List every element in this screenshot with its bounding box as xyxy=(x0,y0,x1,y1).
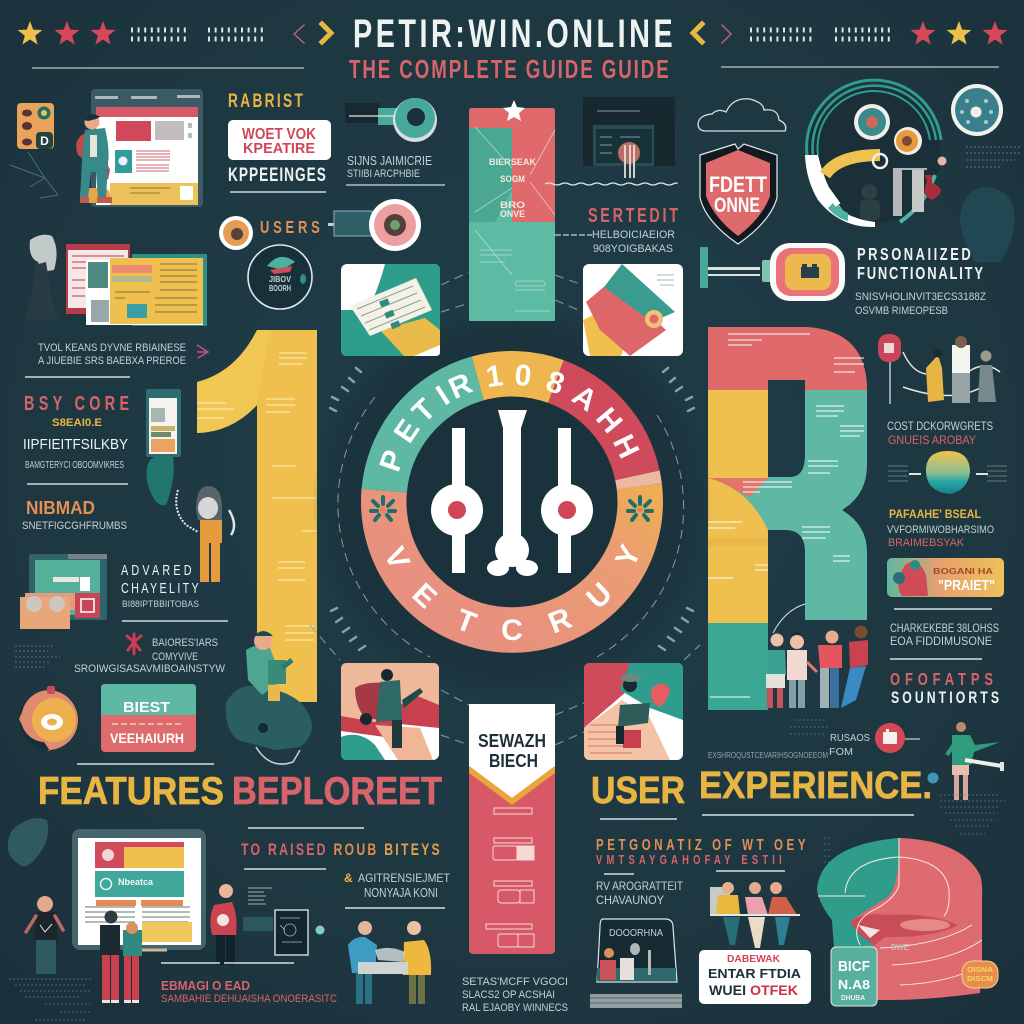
bookmark star xyxy=(503,100,525,121)
disc badge top right xyxy=(951,84,1003,136)
text block: personal story: PETGONATIZ OF WT OEY xyxy=(596,835,806,853)
bookmark labels xyxy=(489,157,536,219)
panel: browser illustration xyxy=(76,89,203,207)
white offer card: WUEI OTFEK xyxy=(709,982,798,998)
stars left xyxy=(18,21,115,44)
text block: core intro xyxy=(25,342,208,377)
teal stat card: DHUBA xyxy=(841,995,865,1002)
ring lettering top: E xyxy=(388,414,426,449)
illustrated man lifting xyxy=(947,722,1004,800)
small discs xyxy=(854,104,890,140)
chevrons left xyxy=(294,24,331,43)
text block: personalized functionality: SNISVHOLINVIT3ECS3188Z xyxy=(855,291,986,303)
ring lettering top xyxy=(374,359,645,476)
text block: nibmad: NIBMAD xyxy=(26,498,95,518)
chevrons right xyxy=(693,24,731,43)
panel: tablet xyxy=(72,829,206,950)
laptop scene xyxy=(590,919,682,1008)
text block: rabrist: KPPEEINGES xyxy=(228,164,326,186)
icon row: rusaos: FOM xyxy=(829,747,853,758)
text block: nibmad xyxy=(22,498,127,532)
connector lens xyxy=(328,199,421,251)
banner: project: BOGANI HA xyxy=(933,567,993,576)
text block: bsy core xyxy=(23,392,129,484)
ring lettering bottom: V xyxy=(377,542,416,575)
text block: bsy core: BAMGTERYCI OBOOMVIKRES xyxy=(25,460,124,471)
teal stat card: BICF xyxy=(838,958,870,975)
laptop scene: DOOORHNA xyxy=(609,928,663,939)
text block: advanced: BI88IPTBBIITOBAS xyxy=(122,599,199,609)
icon: app tile xyxy=(17,103,54,149)
icon: cloud xyxy=(698,99,786,131)
seated woman xyxy=(861,184,877,200)
panel: monitor and tiles xyxy=(20,554,107,629)
callout card: KPEATIRE xyxy=(243,140,315,157)
text block: core intro: TVOL KEANS DYVNE RBIAINESE xyxy=(38,342,186,354)
white offer card: DABEWAK xyxy=(727,954,781,965)
text block: centre bottom: RAL EJAOBY WINNECS xyxy=(462,1002,568,1014)
icon: schematic screen xyxy=(243,888,324,955)
tick rows left xyxy=(131,30,267,39)
banner: project xyxy=(887,558,1004,597)
text block: charkeke: EOA FIDDIMUSONE xyxy=(890,634,992,648)
text block: advanced: CHAYELITY xyxy=(121,579,199,596)
illustrated trio with pin xyxy=(878,334,1000,404)
heading: features: FEATURES xyxy=(38,770,224,813)
card: best voucher: BIEST xyxy=(123,699,170,716)
shield badge: ONNE xyxy=(714,194,760,217)
heading: user experience: EXPERIENCE. xyxy=(699,765,932,807)
text block: bsy core: IIPFIEITFSILKBY xyxy=(23,436,128,453)
ringed badge: JIBOV xyxy=(269,275,292,284)
bookmark labels: BIERSEAK xyxy=(489,157,536,167)
big circular scene xyxy=(805,80,946,227)
document stack xyxy=(63,242,207,326)
icon: speech badge xyxy=(19,686,79,751)
text block: ofofatps: SOUNTIORTS xyxy=(891,689,999,708)
bookmark items xyxy=(486,808,534,947)
illustrated presenter xyxy=(26,896,63,974)
ghost leaf xyxy=(8,818,48,866)
ring lettering top: 8 xyxy=(542,365,569,401)
ring lettering top: T xyxy=(406,393,442,429)
text block: centre bottom: SLACS2 OP ACSHAI xyxy=(462,989,555,1001)
icon: lens connector xyxy=(345,98,437,142)
card: seated figure xyxy=(341,663,439,760)
connector dashes xyxy=(310,272,700,745)
text block: personal story: VMTSAYGAHOFAY ESTII xyxy=(596,854,782,867)
subtitle: THE COMPLETE GUIDE GUIDE xyxy=(349,54,669,84)
ghost network branch xyxy=(10,152,58,198)
dial halo xyxy=(312,302,712,702)
teal arcs xyxy=(807,80,941,155)
text block: advanced xyxy=(121,561,228,621)
text block: cost xyxy=(887,419,993,447)
card: person with heart xyxy=(584,663,683,760)
icon: headphones badge xyxy=(219,216,253,250)
big yellow numeral 1 xyxy=(197,330,317,702)
wavy rule xyxy=(545,183,677,185)
text block: core intro: A JIUEBIE SRS BAEBXA PREROE xyxy=(38,355,186,367)
bookmark heading: SEWAZH xyxy=(478,731,546,751)
illustrated trio at rail xyxy=(710,871,800,948)
ring lettering bottom: Y xyxy=(609,540,648,572)
text block: baiores xyxy=(74,634,226,675)
ring lettering top: I xyxy=(431,380,456,412)
text block: baiores: COMYVIVE xyxy=(152,651,198,663)
text block: sertedit xyxy=(555,204,678,255)
pin tag xyxy=(878,334,901,404)
stars right xyxy=(911,21,1007,44)
text block: agitrensie: AGITRENSIEJMET xyxy=(358,871,451,885)
text block: rabrist xyxy=(228,90,331,192)
teal stat card xyxy=(831,947,877,1006)
ring lettering top: P xyxy=(374,446,411,476)
icon: gradient brain xyxy=(888,451,1007,494)
text block: pafaahe: VVFORMIWOBHARSIMO xyxy=(887,524,994,536)
icon row: rusaos: RUSAOS xyxy=(830,733,870,744)
shield badge: FDETT xyxy=(709,172,767,197)
text block: nibmad: SNETFIGCGHFRUMBS xyxy=(22,520,127,532)
central dial xyxy=(312,302,712,702)
text block: sertedit: 908YOIGBAKAS xyxy=(593,243,673,255)
large dome diagram: BWE xyxy=(891,943,909,952)
heading: user experience: USER xyxy=(591,770,685,812)
icon: red flower xyxy=(127,634,141,654)
card: tilted book xyxy=(583,264,683,356)
orange tag xyxy=(962,961,998,988)
illustrated group of friends xyxy=(766,626,868,708)
red knob xyxy=(924,175,941,200)
ghost figure xyxy=(25,235,58,320)
device with handle xyxy=(700,243,845,301)
orange tag: DISCM xyxy=(967,976,993,983)
text block: sijns: STIIBI ARCPHBIE xyxy=(347,168,420,180)
ghost lightbulb xyxy=(960,187,1015,262)
text block: personalized functionality: OSVMB RIMEOPESB xyxy=(855,305,948,317)
panel: tablet: Nbeatca xyxy=(118,877,154,887)
text block: pafaahe: PAFAAHE' BSEAL xyxy=(889,507,981,521)
ring lettering bottom: T xyxy=(451,603,480,641)
heading: features: BEPLOREET xyxy=(232,770,442,813)
text block: baiores: BAIORES'IARS xyxy=(152,637,218,649)
ring segments xyxy=(384,374,640,630)
text block: personalized functionality: FUNCTIONALITY xyxy=(857,264,983,284)
bookmark labels: SOGM xyxy=(500,174,525,184)
bookmark labels: BRO xyxy=(500,200,525,210)
text block: personal story: RV AROGRATTEIT xyxy=(596,879,684,893)
users row: USERS xyxy=(260,218,320,238)
icon row: rusaos: EXSHROQUSTCEVARIHSOGNOEEOM xyxy=(708,751,828,760)
text block: ofofatps xyxy=(890,670,999,708)
illustrated handshake pair xyxy=(348,921,431,1004)
callout card: WOET VOK xyxy=(242,126,316,143)
text block: agitrensie: NONYAJA KONI xyxy=(364,885,438,900)
callout card xyxy=(228,120,331,160)
text block: pafaahe: BRAIMEBSYAK xyxy=(888,537,965,549)
ring lettering bottom: R xyxy=(544,602,577,641)
card: best voucher: VEEHAIURH xyxy=(110,730,184,746)
text block: personalized functionality xyxy=(855,245,986,317)
text block: ebmagi: SAMBAHIE DEHUAISHA ONOERASITC xyxy=(161,993,337,1005)
large dome diagram xyxy=(817,838,982,1000)
text block: sertedit: SERTEDIT xyxy=(588,204,678,227)
ring lettering top: H xyxy=(606,430,645,464)
ring lettering top: A xyxy=(566,379,603,418)
ring lettering top: 0 xyxy=(513,359,533,393)
bars xyxy=(893,170,902,216)
illustrated man in red shirt xyxy=(210,884,236,965)
text block: sertedit: HELBOICIAEIOR xyxy=(592,229,675,241)
illustrated rider xyxy=(226,631,312,764)
teal stat card: N.A8 xyxy=(838,977,870,992)
text block: bsy core: BSY CORE xyxy=(24,392,129,415)
text block: to raised: TO RAISED ROUB BITEYS xyxy=(241,841,440,860)
banner: project: "PRAIET" xyxy=(938,577,995,594)
text block: bsy core: S8EAI0.E xyxy=(52,417,102,429)
bottom bookmark panel xyxy=(469,704,555,954)
header xyxy=(18,11,1007,84)
text block: charkeke xyxy=(890,609,999,659)
icon row: rusaos xyxy=(708,723,920,760)
monitor with tuning fork xyxy=(545,97,677,185)
top bookmark panel xyxy=(469,100,555,321)
teal leaf xyxy=(146,455,174,505)
ring flowers xyxy=(371,497,652,520)
header rules xyxy=(32,67,999,68)
heading: features xyxy=(38,764,442,813)
ring lettering bottom: U xyxy=(580,577,619,615)
yellow arm xyxy=(825,155,880,175)
ring lettering bottom: C xyxy=(501,614,523,647)
dashed orbit xyxy=(338,397,684,657)
text block: personal story: CHAVAUNOY xyxy=(596,893,664,907)
bookmark labels: ONVE xyxy=(500,209,525,219)
text block: personal story xyxy=(596,835,806,907)
icon: red badge xyxy=(875,723,920,753)
text block: cost: GNUEIS AROBAY xyxy=(888,433,976,447)
users row xyxy=(219,199,421,309)
card: open ledger xyxy=(341,264,440,356)
text block: personalized functionality: PRSONAIIZED xyxy=(857,245,971,265)
text block: rabrist: RABRIST xyxy=(228,90,303,112)
ring lettering top: 1 xyxy=(484,359,505,394)
card: best voucher xyxy=(101,684,196,752)
text block: ebmagi xyxy=(161,963,337,1005)
ringed badge: BOORH xyxy=(269,284,291,293)
text block: ofofatps: OFOFATPS xyxy=(890,670,993,690)
illustrated pair in red trousers xyxy=(100,910,167,1003)
text block: ebmagi: EBMAGI O EAD xyxy=(161,978,250,993)
heading: user experience xyxy=(591,765,938,819)
ring lettering top: H xyxy=(589,402,629,440)
dotted text bottom left xyxy=(9,979,92,1020)
dotted text left xyxy=(15,646,60,667)
ring lettering top: R xyxy=(444,367,477,406)
shield badge xyxy=(700,144,777,244)
big multicolour letter R xyxy=(708,327,867,710)
text block: advanced: ADVARED xyxy=(121,561,192,578)
orange tag: OISNA xyxy=(967,967,993,974)
text block: sijns xyxy=(346,153,445,185)
title: PETIR:WIN.ONLINE xyxy=(353,11,673,56)
dotted text top right xyxy=(966,147,1020,167)
text block: agitrensie: & xyxy=(344,871,353,885)
ring lettering bottom xyxy=(377,540,648,647)
bottom bookmark panel: BIECH xyxy=(489,751,538,771)
white offer card: ENTAR FTDIA xyxy=(708,966,802,981)
tick rows right xyxy=(750,30,894,39)
white offer card xyxy=(699,950,811,1004)
icon: app tile: D xyxy=(40,134,49,148)
illustrated woman xyxy=(176,486,234,582)
text block: pafaahe xyxy=(887,507,994,549)
icon: phone xyxy=(146,389,181,457)
text block: sijns: SIJNS JAIMICRIE xyxy=(347,153,432,168)
radial ticks xyxy=(330,368,694,650)
dotted text right xyxy=(790,720,1005,862)
ringed badge xyxy=(248,245,312,309)
slider symbol xyxy=(431,410,593,576)
text block: baiores: SROIWGISASAVMIBOAINSTYW xyxy=(74,663,226,675)
text block: centre bottom: SETAS'MCFF VGOCI xyxy=(462,976,568,988)
text block: agitrensie xyxy=(344,871,451,908)
illustrated man xyxy=(76,114,112,203)
text block: cost: COST DCKORWGRETS xyxy=(887,419,993,433)
ring lettering bottom: E xyxy=(406,577,443,615)
white rim xyxy=(805,155,875,227)
text block: centre bottom xyxy=(462,976,568,1014)
